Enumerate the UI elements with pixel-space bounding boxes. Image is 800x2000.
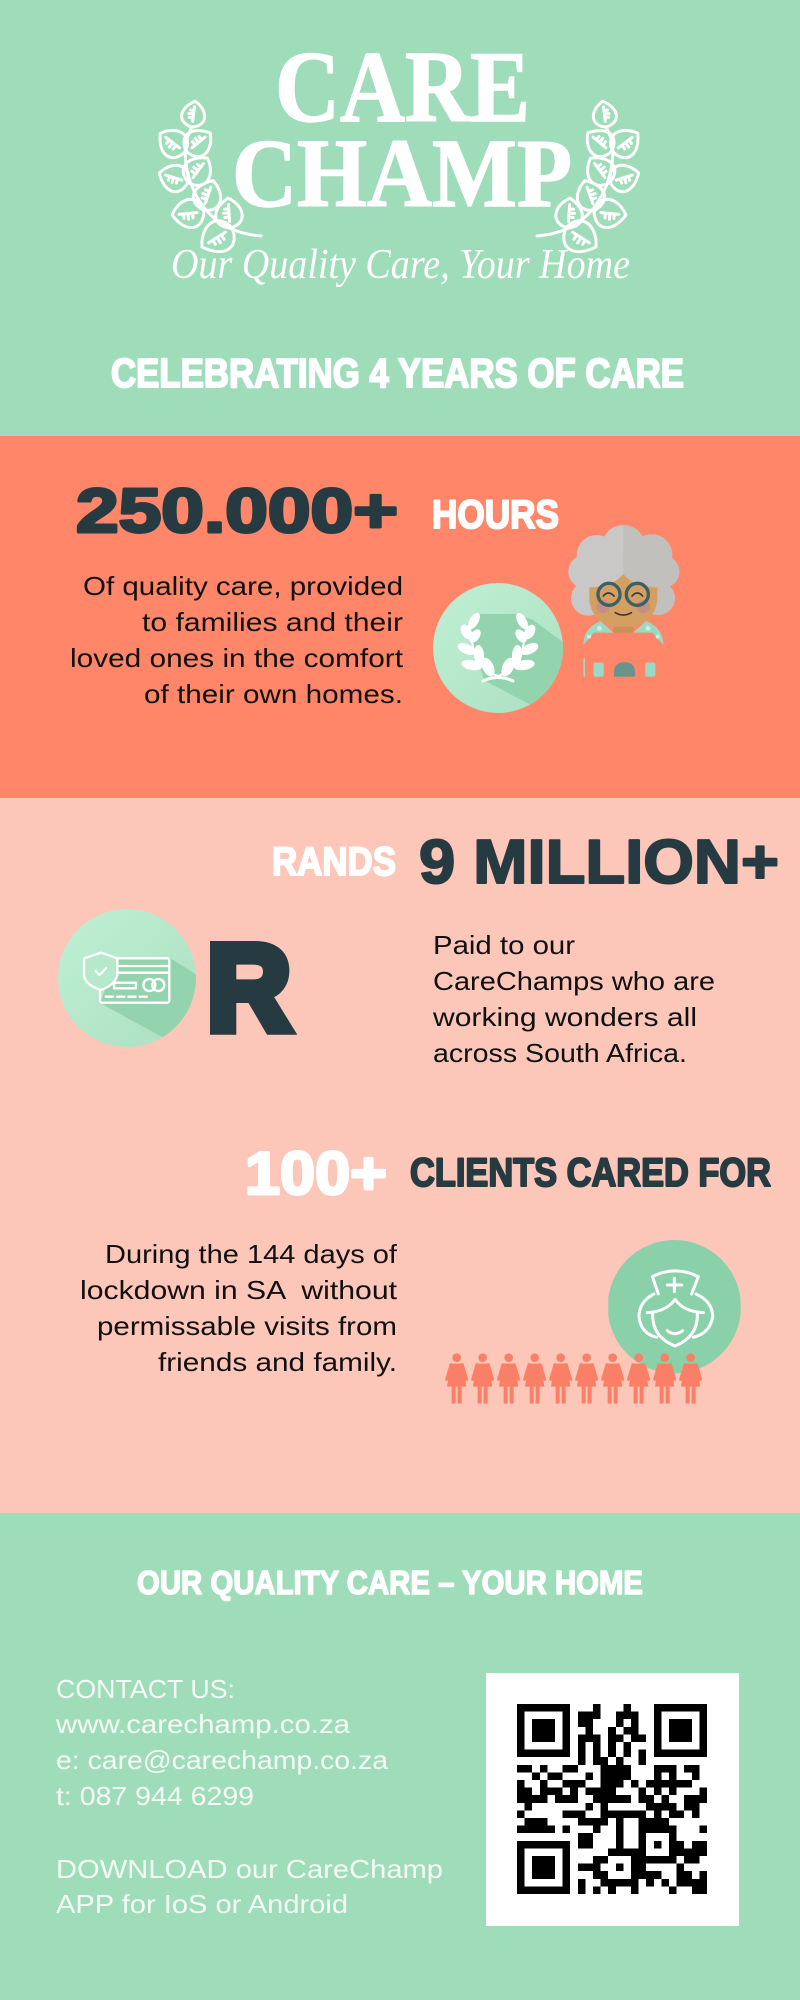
text block: contact details: DOWNLOAD our CareChamp: [56, 1854, 443, 1884]
panel: footer background: [0, 1513, 800, 2000]
text block: paid to carechamps: [432, 930, 715, 1068]
icon: nurse badge: [608, 1240, 741, 1373]
icon: left laurel branch: [152, 100, 261, 260]
text block: lockdown: [80, 1239, 398, 1377]
icon: laurel wreath badge: [433, 583, 563, 713]
text block: quality care: of their own homes.: [144, 679, 403, 709]
title: CARE: CARE: [275, 31, 530, 144]
stat: 9 million+: 9 MILLION+: [419, 828, 779, 897]
chart: row of ten people: [447, 1353, 701, 1404]
title: CHAMP: CHAMP: [232, 120, 572, 227]
label: rands: RANDS: [272, 840, 396, 884]
text block: contact details: CONTACT US:: [56, 1674, 235, 1704]
text block: quality care: loved ones in the comfort: [70, 643, 404, 673]
heading: celebrating 4 years: CELEBRATING 4 YEARS OF CARE: [111, 350, 684, 396]
text block: quality care: Of quality care, provided: [83, 571, 403, 601]
panel: hours background: [0, 436, 800, 798]
stat: 100+: 100+: [245, 1140, 387, 1207]
panel: header background: [0, 0, 800, 436]
icon: secure card badge: [58, 909, 197, 1047]
text block: paid to carechamps: Paid to our: [433, 930, 575, 960]
label: hours: HOURS: [432, 493, 559, 537]
text block: paid to carechamps: working wonders all: [432, 1002, 697, 1032]
icon: right laurel branch: [537, 100, 646, 260]
icon: large letter R: R: [207, 920, 291, 1056]
text block: lockdown: permissable visits from: [97, 1311, 397, 1341]
stat: 250.000+: 250.000+: [76, 477, 398, 546]
text block: contact details: e: care@carechamp.co.za: [56, 1745, 389, 1775]
text block: quality care: [70, 571, 404, 709]
panel: rands and clients background: [0, 798, 800, 1513]
heading: our quality care: OUR QUALITY CARE – YOUR HOME: [137, 1564, 643, 1601]
text block: lockdown: friends and family.: [158, 1347, 397, 1377]
text block: paid to carechamps: across South Africa.: [433, 1038, 687, 1068]
text block: lockdown: During the 144 days of: [105, 1239, 398, 1269]
text block: quality care: to families and their: [142, 607, 403, 637]
icon: grandmother: [568, 525, 679, 677]
logo: Care Champ with laurel branches: [152, 31, 646, 288]
QR code: [486, 1673, 739, 1926]
text block: contact details: [55, 1674, 443, 1919]
text block: contact details: t: 087 944 6299: [56, 1781, 254, 1811]
text block: paid to carechamps: CareChamps who are: [433, 966, 715, 996]
text block: contact details: www.carechamp.co.za: [55, 1709, 351, 1739]
text block: contact details: APP for IoS or Android: [56, 1889, 348, 1919]
text block: lockdown: lockdown in SA without: [80, 1275, 398, 1305]
tagline: Our Quality Care, Your Home: [171, 242, 630, 288]
